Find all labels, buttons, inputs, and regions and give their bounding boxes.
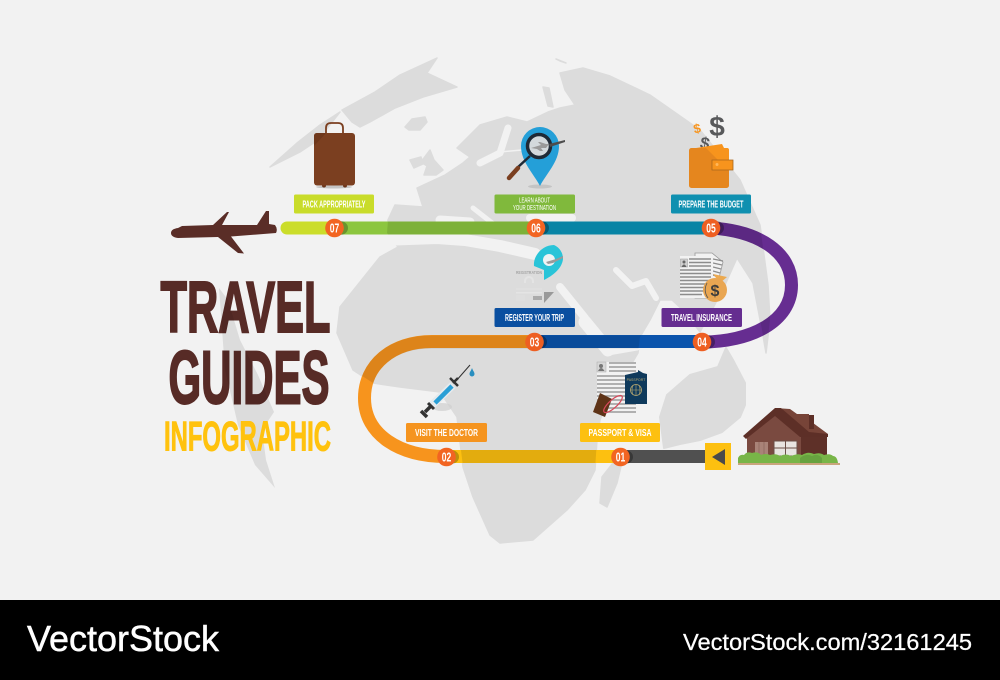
step 04: 04: [697, 335, 707, 350]
title: [160, 268, 331, 460]
icon: wallet with dollar signs: $: [699, 133, 712, 154]
label: pack appropriately: PACK APPROPRIATELY: [302, 199, 366, 211]
icon: register your trip: REGISTRATION: [516, 270, 542, 275]
step 01: 01: [616, 450, 625, 465]
label: travel insurance: [662, 308, 742, 327]
segment 05: [536, 222, 711, 234]
label: learn about your destination: YOUR DESTINATION: [513, 203, 556, 212]
step 07: 07: [330, 221, 339, 236]
labels: [294, 194, 751, 442]
step 04: [693, 333, 715, 351]
icon: passport and visa documents: PASSPORT: [627, 378, 646, 382]
label: learn about your destination: [494, 194, 575, 214]
label: passport and visa: [580, 423, 660, 442]
icon: passport and visa documents: [593, 362, 647, 417]
label: learn about your destination: LEARN ABOUT: [519, 196, 550, 204]
icon: house: [738, 408, 840, 465]
step 05: 05: [706, 221, 716, 236]
step 01: [611, 448, 633, 466]
watermark url: VectorStock.com/32161245: [683, 629, 972, 655]
icon: wallet with dollar signs: $: [709, 111, 725, 142]
watermark logo: VectorStock: [27, 618, 220, 659]
airplane: [171, 211, 277, 254]
title: GUIDES: [168, 336, 330, 420]
start marker: [705, 443, 731, 470]
map shading on route: [335, 228, 792, 456]
step 03: [525, 333, 547, 351]
icon: insurance papers with money bag: $: [711, 283, 720, 300]
segment purple curve: [702, 228, 792, 342]
label: prepare the budget: PREPARE THE BUDGET: [678, 199, 744, 211]
label: visit the doctor: VISIT THE DOCTOR: [415, 427, 478, 439]
step circles: [325, 219, 724, 466]
icon: syringe: [421, 365, 474, 417]
label: passport and visa: PASSPORT & VISA: [588, 427, 652, 439]
segment 07: [287, 222, 335, 234]
step 03: 03: [530, 335, 539, 350]
step 05: [702, 219, 724, 237]
segment start: [620, 450, 706, 463]
segment 03 to 04: [534, 335, 702, 348]
step 06: [527, 219, 549, 237]
step 02: 02: [442, 450, 451, 465]
icon: location pin with magnifier: [509, 127, 565, 188]
icon: insurance papers with money bag: [680, 253, 727, 302]
route path: [287, 228, 792, 456]
icon: wallet with dollar signs: $: [692, 120, 703, 137]
icon: register your trip: [516, 245, 563, 303]
label: pack appropriately: [294, 194, 374, 214]
footer bar: [0, 600, 1000, 680]
title: INFOGRAPHIC: [164, 412, 331, 460]
title: TRAVEL: [160, 268, 330, 348]
segment orange curve: [364, 342, 534, 456]
world map background: [219, 58, 770, 543]
label: travel insurance: TRAVEL INSURANCE: [671, 312, 732, 324]
icon: suitcase: [314, 123, 355, 188]
label: prepare the budget: [671, 194, 751, 214]
segment 06: [335, 222, 536, 234]
label: register your trip: [494, 308, 575, 327]
label: register your trip: REGISTER YOUR TRIP: [505, 312, 564, 324]
step 07: [325, 219, 348, 237]
step 02: [437, 448, 459, 466]
icon: wallet with dollar signs: [689, 111, 733, 188]
step 06: 06: [531, 221, 541, 236]
segment 01 to 02: [446, 450, 620, 463]
label: visit the doctor: [406, 423, 487, 442]
